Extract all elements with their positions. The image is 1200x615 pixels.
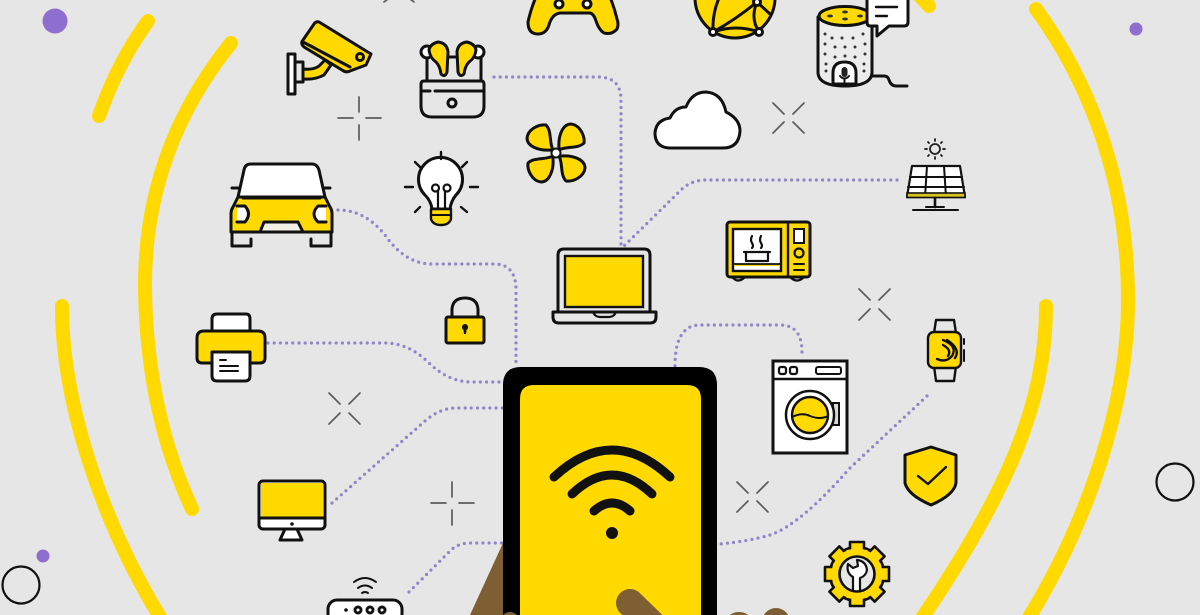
hand: finger and knuckles [501,603,790,615]
icon: light bulb [405,152,478,225]
icon: fan [527,124,585,182]
icon: smart watch [928,320,964,381]
sparkle marks [329,0,890,525]
icon: padlock [446,298,484,343]
icon: game controller [528,0,618,34]
icon: globe network [695,0,775,38]
icon: cloud [655,92,740,148]
icon: smart speaker with speech bubble [818,0,908,86]
icon: washing machine [773,361,847,453]
hand holding phone: palm behind [470,543,510,615]
phone [503,367,717,615]
icon: wireless earbuds [421,42,484,117]
icon: printer [197,314,265,381]
icon: security shield [905,447,956,505]
icon: laptop [553,249,656,323]
icon: wifi router [328,578,402,615]
icon: wifi symbol [554,450,670,539]
icon: microwave oven [727,222,810,280]
icon: desktop monitor [259,481,325,540]
icon: gear with wrench [825,542,889,606]
icon: security camera [288,22,371,94]
icon: car [231,164,332,246]
icon: solar panel [907,139,965,210]
dotted connector lines [268,77,927,592]
